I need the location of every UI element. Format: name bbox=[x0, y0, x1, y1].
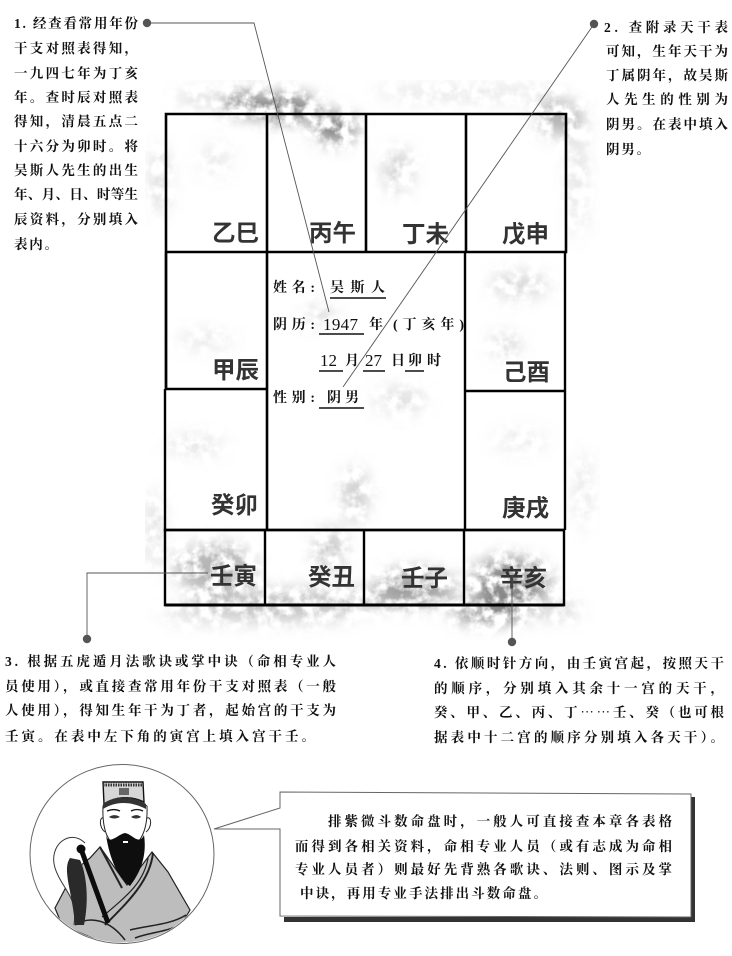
palace stem-branch labels: 甲辰 bbox=[212, 357, 259, 383]
centre palace: birth data: 吴斯人 bbox=[330, 280, 385, 296]
palace stem-branch labels: 辛亥 bbox=[500, 564, 547, 591]
step 1 text: 1. 经查看常用年份 bbox=[14, 15, 138, 31]
centre palace: birth data: 月 bbox=[345, 353, 359, 369]
eyes and brows bbox=[107, 810, 143, 811]
step 1 text: 辰资料，分别填入 bbox=[14, 211, 138, 228]
callout shadow bbox=[284, 797, 695, 922]
centre palace: birth data: 阴历: bbox=[273, 317, 315, 333]
centre palace: birth data bbox=[273, 279, 464, 408]
centre palace: birth data: 日 bbox=[391, 353, 405, 369]
palace stem-branch labels bbox=[210, 220, 550, 591]
centre palace: birth data: 年 bbox=[369, 316, 383, 333]
step 4 text: 的顺序，分别填入其余十一宫的天干， bbox=[434, 680, 724, 697]
step 2 text bbox=[604, 19, 728, 157]
whisk bbox=[54, 837, 85, 925]
step 2 text: 2. 查附录天干表 bbox=[604, 19, 728, 35]
step 1 text: 年、月、日、时等生 bbox=[14, 186, 138, 202]
centre palace: birth data: 27 bbox=[365, 351, 382, 370]
callout text: 专业人员者）则最好先背熟各歌诀、法则、图示及掌 bbox=[295, 861, 672, 878]
centre palace: birth data: 阴男 bbox=[327, 390, 359, 406]
centre palace: birth data: 性别: bbox=[273, 389, 315, 406]
robe bbox=[55, 847, 190, 950]
step 4 text: 癸、甲、乙、丙、丁……壬、癸（也可根 bbox=[434, 701, 724, 721]
step 1 text: 干支对照表得知， bbox=[14, 40, 138, 57]
callout text: 而得到各相关资料，命相专业人员（或有志成为命相 bbox=[295, 838, 672, 855]
centre palace: birth data: 姓名: bbox=[273, 279, 315, 296]
ears bbox=[100, 818, 151, 832]
centre palace: birth data: 卯时 bbox=[408, 352, 441, 369]
callout text bbox=[295, 813, 672, 902]
step 3 text: 3. 根据五虎遁月法歌诀或掌中诀（命相专业人 bbox=[5, 653, 336, 669]
step 3 text: 员使用），或直接查常用年份干支对照表（一般 bbox=[5, 678, 336, 695]
step 1 leader line with dot bbox=[143, 19, 329, 312]
beard bbox=[106, 833, 145, 886]
palace stem-branch labels: 戊申 bbox=[502, 221, 549, 247]
step 4 text bbox=[434, 655, 724, 745]
palace stem-branch labels: 己酉 bbox=[503, 359, 550, 385]
step 1 text: 一九四七年为丁亥 bbox=[14, 65, 138, 81]
palace stem-branch labels: 乙巳 bbox=[212, 220, 259, 246]
step 1 text: 十六分为卯时。将 bbox=[14, 138, 138, 154]
step 1 text: 得知，清晨五点二 bbox=[14, 113, 138, 130]
step 3 text bbox=[5, 653, 336, 745]
palace stem-branch labels: 壬寅 bbox=[210, 563, 257, 589]
centre palace: birth data: (丁亥年) bbox=[393, 316, 464, 333]
palace stem-branch labels: 丙午 bbox=[309, 220, 356, 246]
callout text: 中诀，再用专业手法排出斗数命盘。 bbox=[300, 885, 547, 902]
hat bbox=[103, 782, 144, 804]
centre palace: birth data: 1947 bbox=[323, 315, 358, 334]
step 1 text bbox=[14, 15, 138, 252]
step 4 text: 4. 依顺时针方向，由壬寅宫起，按照天干 bbox=[434, 655, 724, 672]
step 1 text: 表内。 bbox=[14, 236, 58, 252]
step 2 text: 可知，生年天干为 bbox=[606, 43, 728, 60]
step 4 text: 据表中十二宫的顺序分别填入各天干）。 bbox=[434, 729, 724, 745]
step 3 text: 壬寅。在表中左下角的寅宫上填入宫干壬。 bbox=[5, 728, 315, 745]
step 2 text: 人先生的性别为 bbox=[606, 91, 728, 107]
centre palace: birth data: 12 bbox=[320, 351, 337, 370]
illustration: scholar portrait in circle bbox=[30, 764, 214, 950]
step 3 leader line with dot bbox=[83, 573, 208, 643]
step 4 leader line with dot bbox=[508, 575, 516, 646]
step 2 text: 阴男。 bbox=[606, 142, 650, 157]
step 1 text: 吴斯人先生的出生 bbox=[14, 162, 138, 178]
mottled paper background bbox=[149, 90, 588, 621]
natal chart grid bbox=[165, 114, 566, 605]
palace stem-branch labels: 壬子 bbox=[401, 565, 448, 591]
palace stem-branch labels: 癸卯 bbox=[211, 492, 258, 518]
face bbox=[102, 805, 148, 840]
palace stem-branch labels: 丁未 bbox=[402, 221, 449, 247]
step 2 leader line with dot bbox=[343, 20, 598, 387]
palace stem-branch labels: 庚戌 bbox=[502, 494, 549, 521]
step 2 text: 丁属阴年，故吴斯 bbox=[606, 67, 728, 84]
callout text: 排紫微斗数命盘时，一般人可直接查本章各表格 bbox=[328, 813, 672, 830]
scepter bbox=[81, 849, 108, 923]
step 1 text: 年。查时辰对照表 bbox=[14, 89, 138, 105]
callout box with pointer bbox=[214, 792, 691, 917]
palace stem-branch labels: 癸丑 bbox=[308, 564, 355, 590]
step 3 text: 人使用），得知生年干为丁者，起始宫的干支为 bbox=[5, 702, 336, 719]
step 2 text: 阴男。在表中填入 bbox=[606, 116, 728, 132]
collar and sash bbox=[100, 847, 153, 925]
